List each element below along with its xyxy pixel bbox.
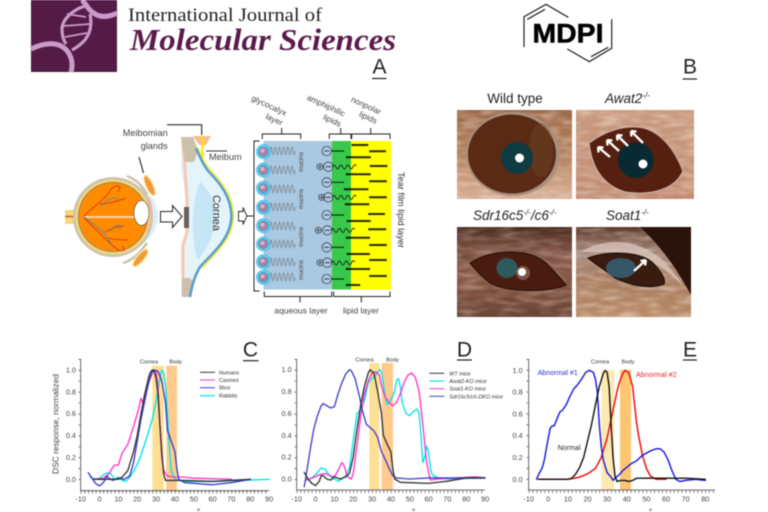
y axis labels: 1.0 — [282, 365, 292, 374]
y axis labels: 0.0 — [66, 475, 76, 484]
top braces — [262, 128, 390, 139]
label: nonpolar lipids: nonpolar — [350, 95, 383, 117]
cornea band — [369, 363, 379, 490]
x axis labels: 30 — [368, 495, 376, 504]
x axis labels: 20 — [583, 495, 592, 504]
label: glycocalyx layer: glycocalyx — [250, 94, 288, 118]
x axis labels: 0 — [313, 495, 318, 504]
MDPI logo: MDPI — [532, 19, 604, 49]
aqueous layer — [264, 141, 332, 290]
x axis labels: 30 — [603, 495, 611, 504]
band headings: Body — [169, 360, 182, 366]
y axis labels: 1.0 — [513, 366, 523, 375]
y axis title: DSC response, normalized — [50, 374, 60, 474]
x axis labels: 10 — [114, 495, 122, 504]
mucins labels: mucins — [298, 227, 305, 247]
cornea band — [152, 366, 164, 491]
band headings: Cornea — [140, 360, 159, 366]
x axis labels: 60 — [662, 495, 670, 504]
x axis labels: 0 — [97, 495, 102, 504]
legend: Rabbits — [219, 394, 238, 400]
x axis labels: 70 — [443, 495, 451, 504]
panel label E: E — [683, 338, 697, 362]
heading: Sdr16c5/c6: -/- — [549, 208, 557, 217]
body band — [382, 363, 393, 490]
x axis labels: 10 — [330, 495, 338, 504]
label: Abnormal #1: Abnormal #1 — [538, 370, 578, 377]
x axis labels: 80 — [701, 495, 709, 504]
x axis labels: 60 — [209, 495, 217, 504]
band headings — [591, 360, 635, 366]
panel label D: D — [457, 338, 472, 362]
legend: Soat1-KO mice — [449, 387, 486, 393]
y axis labels — [282, 365, 292, 484]
x axis labels: 10 — [564, 495, 572, 504]
body band — [166, 366, 177, 491]
journal title — [128, 5, 396, 57]
mucins labels: mucins — [298, 260, 305, 280]
arrow: eye to cornea — [160, 206, 182, 228]
y axis labels: 0.4 — [282, 431, 292, 440]
y axis labels: 0.6 — [66, 409, 76, 418]
panel label C: C — [243, 338, 258, 362]
label: nonpolar lipids — [350, 95, 383, 126]
y axis labels: 0.6 — [282, 409, 292, 418]
mucins labels: mucins — [298, 152, 305, 172]
x axis labels: 40 — [171, 495, 179, 504]
band headings — [140, 360, 182, 366]
legend: Humans — [219, 370, 239, 376]
label: amphiphilic lipids: lipids — [322, 113, 342, 129]
journal title: Molecular Sciences — [129, 22, 396, 57]
x axis labels: -10 — [523, 495, 534, 504]
x axis labels: 90 — [481, 495, 489, 504]
nonpolar lipid molecules — [344, 145, 387, 285]
heading: Sdr16c5/c6: Sdr16c5 — [473, 208, 523, 223]
amphiphilic lipid band — [332, 141, 351, 290]
band headings: Body — [386, 358, 399, 364]
panel D: mouse strain DSC chart — [282, 338, 503, 512]
y axis labels: 0.2 — [513, 453, 523, 462]
arrow: white marker — [634, 260, 646, 271]
panel A: eye and tear film diagram — [65, 93, 406, 315]
x axis labels: 60 — [425, 495, 433, 504]
legend: Mice — [219, 386, 230, 392]
tear film left bracket — [247, 141, 260, 291]
legend: Canines — [219, 378, 239, 384]
mucins labels: mucins — [298, 189, 305, 209]
x axis labels: 70 — [682, 495, 690, 504]
y axis labels: 0.4 — [66, 431, 76, 440]
label: Meibomian glands — [123, 128, 168, 173]
leader line to meibum — [167, 125, 202, 135]
icon: upper meibomian gland — [142, 174, 157, 197]
heading: Soat1: Soat1 — [606, 208, 641, 223]
heading: Wild type: Wild type — [487, 91, 543, 106]
x axis labels: 40 — [387, 495, 395, 504]
mucins labels — [298, 152, 305, 280]
icon: cornea section: Cornea — [210, 195, 222, 232]
panel E: normal versus abnormal DSC chart — [513, 338, 715, 512]
y axis labels — [513, 366, 523, 484]
heading: Soat1: -/- — [641, 208, 649, 217]
line chart: species curves — [88, 370, 269, 486]
arrows: white markers — [598, 131, 643, 157]
band headings: Cornea — [355, 358, 375, 364]
x axis labels: 80 — [462, 495, 470, 504]
axes — [80, 359, 269, 492]
y axis labels: 0.8 — [66, 387, 76, 396]
body band — [620, 370, 631, 490]
band headings: Body — [622, 360, 635, 366]
label: Normal: Normal — [558, 445, 581, 452]
arrow: cornea to tear film — [238, 208, 247, 224]
x axis labels: -10 — [291, 495, 302, 504]
nonpolar lipid band — [351, 141, 391, 290]
icon: eyeball cross-section — [65, 176, 158, 263]
amphiphilic lipid molecules — [315, 146, 356, 284]
x axis labels: 50 — [190, 495, 198, 504]
x axis labels: 70 — [227, 495, 235, 504]
panel label B: B — [683, 56, 697, 78]
y axis labels: 0.0 — [513, 475, 523, 484]
y axis labels: 0.2 — [66, 453, 76, 462]
panel C: species DSC chart — [50, 338, 273, 512]
y axis labels: 0.4 — [513, 431, 523, 440]
cornea band — [601, 370, 614, 490]
x axis labels — [523, 495, 709, 504]
label: glycocalyx layer: layer — [264, 112, 284, 128]
label: amphiphilic lipids: amphiphilic — [306, 93, 347, 118]
bottom braces — [264, 292, 390, 302]
label: lipid layer: lipid layer — [343, 306, 379, 316]
label: tear film lipid layer: Tear film lipid layer — [396, 172, 406, 248]
x axis labels: 40 — [623, 495, 631, 504]
x axis labels: 80 — [246, 495, 254, 504]
legend — [200, 370, 239, 400]
axes — [296, 359, 485, 492]
heading: Awat2: -/- — [642, 91, 650, 100]
y axis labels: 0.6 — [513, 409, 523, 418]
x axis labels — [291, 495, 489, 504]
MDPI logo — [524, 4, 612, 62]
journal title: International Journal of — [128, 5, 323, 26]
heading: Awat2: Awat2 — [605, 91, 642, 106]
legend — [429, 371, 503, 400]
journal logo — [31, 0, 117, 72]
mucin strands — [270, 147, 295, 281]
panel label A: A — [372, 56, 387, 78]
line chart: normal and abnormal curves — [537, 370, 705, 481]
legend: WT mice — [449, 371, 471, 377]
band headings — [355, 358, 399, 364]
glycocalyx molecules — [256, 144, 271, 285]
label: Meibum: Meibum — [209, 152, 242, 162]
icon: lower meibomian gland — [131, 247, 150, 269]
x axis labels: 0 — [546, 495, 550, 504]
legend: Awat2-KO mice — [448, 379, 487, 385]
x axis labels: 50 — [406, 495, 414, 504]
x axis labels: 90 — [265, 495, 273, 504]
heading: Sdr16c5/c6: -/- — [523, 208, 531, 217]
x axis labels: 50 — [642, 495, 650, 504]
label: Meibomian glands: Meibomian — [123, 128, 168, 138]
label: nonpolar lipids: lipids — [358, 110, 378, 126]
photo: Awat2 knockout eye — [576, 110, 694, 199]
photo: wild type eye — [457, 110, 572, 199]
label: Meibomian glands: glands — [141, 141, 168, 151]
y axis labels: 1.0 — [66, 366, 76, 374]
y axis labels: 0.2 — [282, 453, 292, 462]
y axis labels: 0.8 — [282, 387, 292, 396]
legend: Sdr16c5/c6-DKO mice — [449, 394, 503, 400]
line chart: mouse curves — [304, 370, 485, 487]
x axis labels: 20 — [133, 495, 141, 504]
icon: cornea section — [181, 136, 234, 297]
y axis labels — [66, 366, 76, 484]
axes — [528, 359, 715, 492]
y axis labels: 0.8 — [513, 388, 523, 397]
x axis labels — [75, 495, 273, 504]
x axis labels: -10 — [75, 495, 86, 504]
panel B: eye photographs — [457, 91, 694, 317]
x axis labels: 30 — [152, 495, 160, 504]
x axis labels: 20 — [349, 495, 357, 504]
band headings: Cornea — [591, 360, 610, 366]
label: Abnormal #2: Abnormal #2 — [636, 372, 677, 379]
y axis labels: 0.0 — [282, 474, 292, 484]
photo: Soat1 knockout eye — [576, 227, 691, 317]
heading: Sdr16c5/c6: /c6 — [530, 208, 549, 223]
label: aqueous layer: aqueous layer — [274, 306, 328, 316]
photo: Sdr16c5/c6 double knockout eye — [457, 227, 572, 317]
